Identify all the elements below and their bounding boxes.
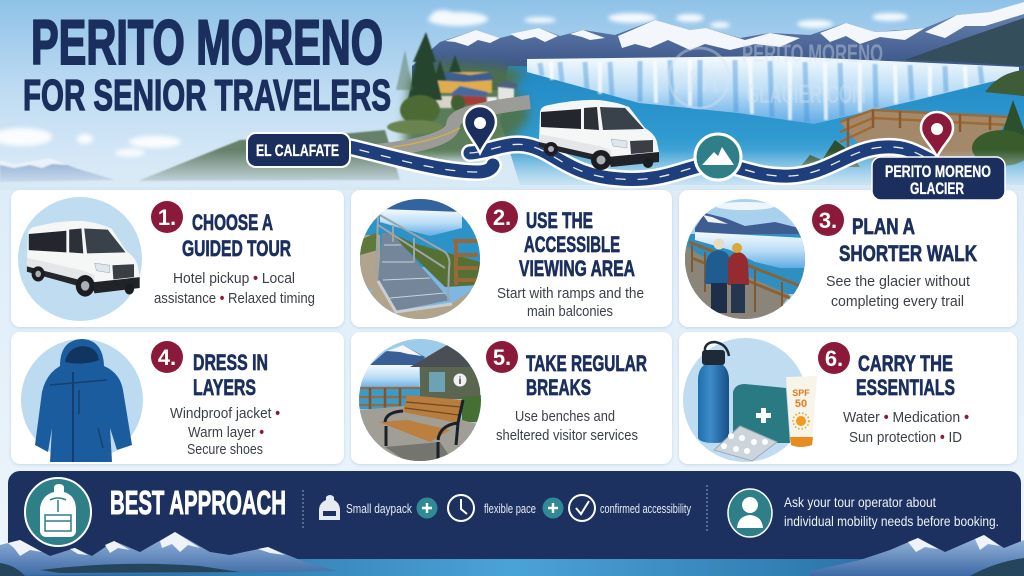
lake — [500, 66, 1024, 185]
panel: card 4 layers — [11, 332, 344, 464]
distant left mountains — [0, 158, 115, 182]
badge 1: 1. — [158, 205, 176, 230]
description: main balconies — [527, 303, 613, 320]
foreground fade — [0, 150, 1024, 190]
icon: plus — [416, 498, 438, 518]
heading: CARRY THE — [858, 351, 953, 376]
badge 2 — [486, 201, 518, 233]
panel: card 3 shorter walk — [679, 190, 1017, 327]
heading: BREAKS — [526, 375, 591, 400]
image: bottle, kit, pills, sunscreen: SPF — [792, 388, 810, 398]
heading: SHORTER WALK — [839, 241, 977, 266]
label: confirmed accessibility: confirmed accessibility — [600, 501, 691, 516]
icon: backpack badge — [25, 478, 91, 546]
watermark: PERITO MORENO — [742, 40, 883, 68]
advice text: Ask your tour operator about — [784, 494, 936, 510]
description — [497, 285, 644, 320]
mountain range — [412, 2, 1024, 90]
image: bench and shelter — [359, 339, 481, 464]
heading: VIEWING AREA — [519, 256, 635, 281]
heading: USE THE — [526, 208, 593, 233]
heading: DRESS IN — [193, 350, 268, 375]
description: Start with ramps and the — [497, 285, 644, 302]
road centre line — [385, 128, 460, 148]
left hill — [138, 130, 400, 181]
badge 5 — [486, 341, 518, 373]
image: ramp and railing — [360, 196, 480, 322]
heading — [856, 351, 955, 400]
icon: blue map pin — [464, 106, 496, 153]
icon: check — [569, 495, 595, 521]
description: completing every trail — [831, 293, 964, 310]
route road — [345, 144, 930, 179]
heading: PLAN A — [852, 214, 915, 239]
description: Windproof jacket • — [170, 405, 280, 422]
sky — [0, 0, 1024, 185]
hero scene — [0, 0, 1024, 190]
label: El Calafate: EL CALAFATE — [256, 141, 339, 160]
sunscreen tube — [786, 376, 817, 447]
water bottle — [698, 342, 729, 443]
pill blister — [714, 426, 777, 461]
heading: CHOOSE A — [192, 210, 273, 235]
description: assistance • Relaxed timing — [154, 290, 315, 307]
conifer trees — [396, 32, 461, 100]
watermark: GLACIER.COM — [746, 79, 866, 109]
town ground — [404, 62, 530, 160]
man figure — [705, 250, 730, 284]
description — [170, 405, 280, 458]
title: FOR SENIOR TRAVELERS — [23, 71, 391, 120]
description: sheltered visitor services — [496, 427, 638, 444]
description — [843, 409, 969, 446]
panel: card 2 accessible viewing area — [351, 190, 672, 327]
badge 6: 6. — [825, 346, 843, 371]
heading: ESSENTIALS — [856, 375, 955, 400]
icon: small daypack — [319, 495, 340, 520]
icon: red map pin — [921, 112, 953, 157]
watermark — [669, 40, 883, 109]
town buildings — [431, 71, 518, 108]
panel: card 6 essentials — [679, 332, 1017, 464]
left mountains — [0, 532, 337, 576]
heading: LAYERS — [193, 375, 256, 400]
label: small daypack: Small daypack — [346, 501, 412, 516]
heading: ACCESSIBLE — [524, 232, 620, 257]
badge 4: 4. — [158, 345, 176, 370]
panel: card 1 guided tour — [11, 190, 344, 327]
right trees — [800, 70, 1024, 167]
image: couple at railing — [685, 197, 805, 322]
image: bench and shelter: i — [459, 376, 462, 387]
panel: card 5 breaks — [351, 332, 672, 464]
bushes — [387, 95, 465, 134]
description: Secure shoes — [187, 441, 263, 458]
title — [23, 8, 391, 120]
image: blue jacket — [21, 339, 143, 462]
water strip — [0, 559, 1024, 576]
badge 6 — [818, 342, 850, 374]
icon: clock — [448, 495, 474, 521]
label: Perito Moreno Glacier — [872, 157, 1005, 200]
description — [154, 270, 315, 307]
heading — [182, 210, 291, 261]
description — [826, 273, 971, 310]
heading — [526, 351, 647, 400]
woman figure — [728, 252, 749, 285]
label: El Calafate — [247, 133, 350, 167]
right dark slopes — [905, 18, 1024, 66]
description: Warm layer • — [188, 424, 264, 441]
description: Hotel pickup • Local — [173, 270, 295, 287]
badge 5: 5. — [493, 345, 511, 370]
asphalt road — [365, 102, 530, 152]
label: Perito Moreno Glacier: GLACIER — [910, 179, 964, 198]
icon: person badge — [728, 489, 772, 537]
badge 1 — [151, 201, 183, 233]
image: van in circle — [18, 197, 142, 321]
glacier front — [527, 56, 1019, 124]
description — [496, 408, 638, 444]
description: Use benches and — [515, 408, 615, 425]
title: PERITO MORENO — [31, 8, 383, 78]
viewing platform — [840, 110, 1009, 160]
description: Water • Medication • — [843, 409, 969, 426]
badge 3: 3. — [819, 208, 837, 233]
badge 3 — [812, 204, 844, 236]
clouds — [0, 10, 908, 157]
description: See the glacier without — [826, 273, 971, 290]
advice text — [784, 494, 999, 529]
white van on route — [539, 100, 659, 170]
heading: TAKE REGULAR — [526, 351, 647, 376]
icon: teal mountain badge — [695, 134, 741, 180]
label: flexible pace: flexible pace — [484, 501, 536, 516]
description: Sun protection • ID — [849, 429, 962, 446]
image: bottle, kit, pills, sunscreen: 50 — [795, 398, 807, 410]
heading — [519, 208, 635, 281]
heading: best approach: BEST APPROACH — [110, 484, 286, 521]
badge 4 — [151, 341, 183, 373]
heading — [839, 214, 977, 266]
image: bottle, kit, pills, sunscreen — [683, 338, 817, 462]
heading: GUIDED TOUR — [182, 236, 291, 261]
heading — [193, 350, 268, 400]
icon: plus — [542, 498, 564, 518]
first aid kit — [733, 384, 790, 443]
right mountains — [810, 535, 1024, 576]
panel: best approach banner — [0, 471, 1024, 576]
badge 2: 2. — [493, 205, 511, 230]
